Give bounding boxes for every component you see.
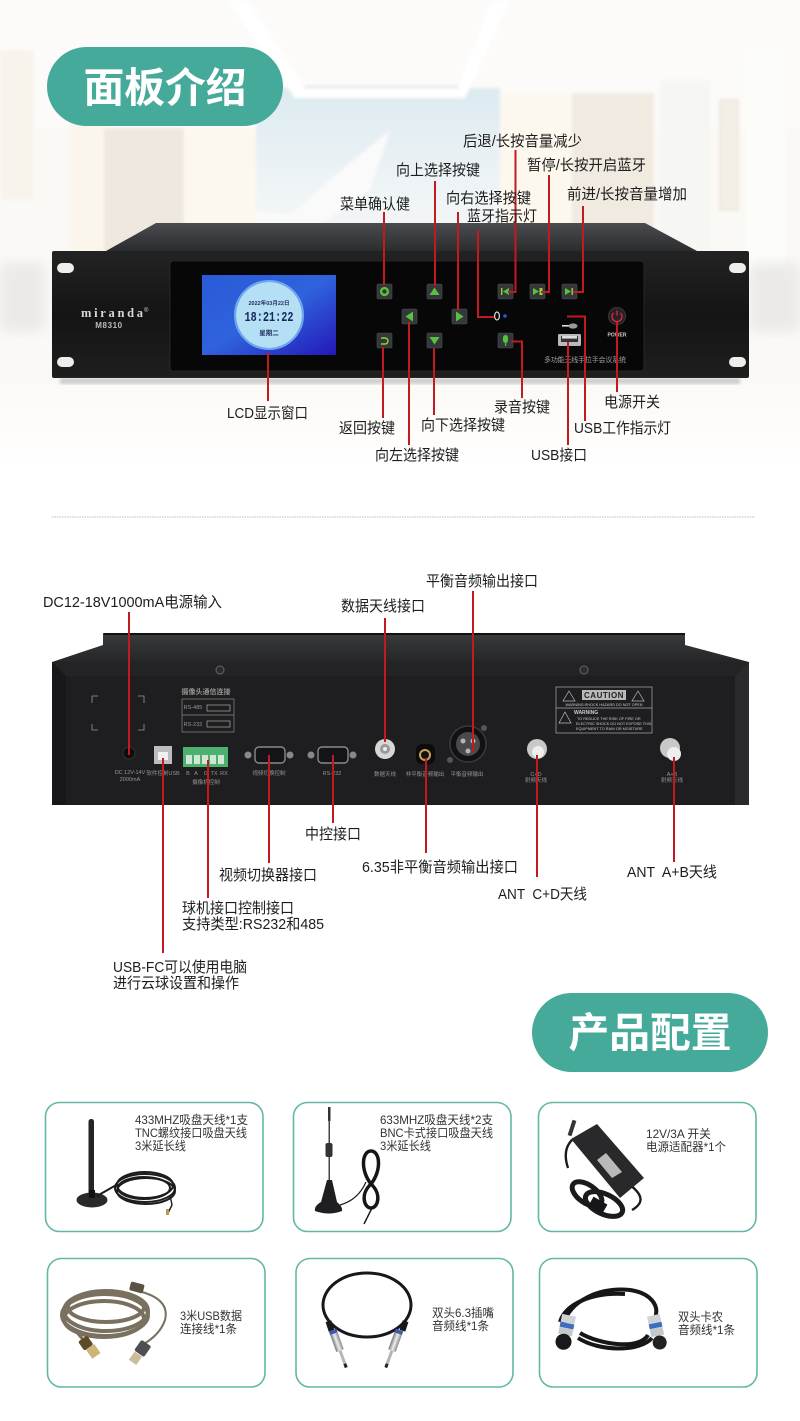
text: XLR cable spec: 音频线*1条 xyxy=(678,1322,735,1337)
callout lines: rear panel xyxy=(129,591,674,953)
LCD screen: 星期二 xyxy=(259,328,279,337)
camera wiring diagram: 摄像头通信连接 xyxy=(182,687,230,696)
green terminal block: B xyxy=(186,771,190,777)
card: XLR audio cable xyxy=(540,1258,757,1387)
USB symbol xyxy=(562,323,578,329)
control window xyxy=(170,261,644,371)
label: USB-FC xyxy=(113,959,247,992)
device face plate xyxy=(52,251,749,378)
label: dome camera control: 支持类型:RS232和485 xyxy=(182,916,324,933)
button: up xyxy=(427,284,442,299)
label: ANT A+B: ANT A+B天线 xyxy=(627,864,717,881)
balanced XLR xyxy=(447,725,487,778)
antenna A+B socket: 射频天线 xyxy=(661,776,683,784)
DC socket xyxy=(115,747,146,783)
green terminal block: RX xyxy=(220,771,228,777)
label: 向左: 向左选择按键 xyxy=(375,447,459,464)
green terminal block: TX xyxy=(210,771,218,777)
label: dome camera control xyxy=(182,900,324,933)
icon: 6.3 jack cable xyxy=(323,1273,411,1369)
icon: magnetic antenna with cable xyxy=(76,1119,175,1215)
card: power adapter xyxy=(538,1102,756,1232)
label: USB指示灯: USB工作指示灯 xyxy=(574,420,671,437)
data antenna BNC: 数据天线 xyxy=(374,770,396,778)
label: 蓝牙: 蓝牙指示灯 xyxy=(467,208,537,225)
brand logo xyxy=(81,306,149,330)
text: USB spec: 连接线*1条 xyxy=(180,1321,237,1336)
LCD screen: 18:21:22 xyxy=(244,311,294,326)
label: 菜单: 菜单确认健 xyxy=(340,196,410,213)
LCD screen: 2022年03月22日 xyxy=(249,299,289,307)
text: 433MHZ spec xyxy=(135,1112,248,1153)
antenna C+D socket: 射频天线 xyxy=(525,776,547,784)
label: 6.35 output: 6.35非平衡音频输出接口 xyxy=(362,859,518,876)
rear body xyxy=(52,662,749,805)
rear screws xyxy=(216,666,588,674)
unbalanced 6.35 jack xyxy=(406,744,444,778)
text: 433MHZ spec: 3米延长线 xyxy=(135,1139,186,1153)
heading pill: 面板介绍: 面板介绍 xyxy=(84,65,246,111)
text: 433MHZ spec: 433MHZ吸盘天线*1支 xyxy=(135,1112,248,1127)
label: 电源: 电源开关 xyxy=(604,394,660,411)
icon: USB cable coil xyxy=(62,1281,166,1365)
icon: sucker antenna with cable xyxy=(315,1107,379,1224)
caution label: EQUIPMENT TO RAIN OR MOISTURE xyxy=(576,727,643,731)
brand logo: M8310 xyxy=(95,321,123,330)
label: balanced output: 平衡音频输出接口 xyxy=(426,573,538,590)
label: 前进: 前进/长按音量增加 xyxy=(567,186,687,203)
button: pause xyxy=(530,284,545,299)
caution label: WARNING xyxy=(574,710,598,716)
text: USB spec: 3米USB数据 xyxy=(180,1308,242,1323)
text: USB spec xyxy=(180,1308,242,1336)
caution label: CAUTION xyxy=(584,691,624,700)
green terminal block xyxy=(183,747,228,786)
text: adapter spec: 电源适配器*1个 xyxy=(646,1140,726,1154)
text: 633MHZ spec xyxy=(380,1112,493,1153)
caution label: WARNING:SHOCK HAZARD DO NOT OPEN xyxy=(566,703,643,707)
green terminal block: A xyxy=(194,771,198,777)
button: left xyxy=(402,309,417,324)
label: USB-FC: 进行云球设置和操作 xyxy=(113,975,239,992)
card: USB cable xyxy=(48,1258,265,1387)
label: LCD: LCD显示窗口 xyxy=(227,404,308,422)
rear panel device xyxy=(52,633,749,805)
antenna C+D socket xyxy=(525,739,547,784)
bracket marks xyxy=(92,696,144,730)
label: 返回: 返回按键 xyxy=(339,420,395,437)
label: data antenna: 数据天线接口 xyxy=(341,598,425,615)
label: 向下: 向下选择按键 xyxy=(421,417,505,434)
video switcher DB9: 视频切换控制 xyxy=(252,769,286,777)
label: 暂停: 暂停/长按开启蓝牙 xyxy=(527,157,646,174)
heading pill: 产品配置 xyxy=(532,993,768,1072)
product caption: 多功能无线手拉手会议系统 xyxy=(544,355,626,364)
camera wiring diagram xyxy=(182,687,234,732)
button: right xyxy=(452,309,467,324)
label: 向右: 向右选择按键 xyxy=(446,190,531,207)
label: USB-FC: USB-FC可以使用电脑 xyxy=(113,959,247,976)
power button xyxy=(608,307,627,338)
RS-232 DB9 xyxy=(308,747,356,777)
DC socket: 2000mA xyxy=(120,777,141,783)
antenna C+D socket: C+D xyxy=(530,772,542,778)
label: 向上: 向上选择按键 xyxy=(396,162,480,179)
balanced XLR: 平衡音频输出 xyxy=(450,770,484,778)
video switcher DB9 xyxy=(244,747,294,777)
antenna A+B socket xyxy=(660,738,683,784)
green terminal block: 摄像机控制 xyxy=(192,778,220,786)
camera wiring diagram: RS-485 xyxy=(184,705,202,711)
caution label: TO REDUCE THE RISK OF FIRE OR xyxy=(577,717,641,721)
device top cover xyxy=(106,223,697,251)
button: back xyxy=(377,333,392,348)
front panel device xyxy=(52,223,749,384)
callout lines: front panel xyxy=(268,150,617,445)
label: central control: 中控接口 xyxy=(305,826,361,843)
USB-B port xyxy=(146,746,180,777)
heading pill: 面板介绍 xyxy=(47,47,283,126)
button: menu confirm xyxy=(377,284,392,299)
text: 433MHZ spec: TNC螺纹接口吸盘天线 xyxy=(135,1125,247,1140)
USB port xyxy=(558,334,581,346)
text: XLR cable spec xyxy=(678,1310,735,1337)
green terminal block: G xyxy=(204,771,208,777)
DC socket: DC 12V-14V xyxy=(115,770,146,776)
power button: POWER xyxy=(608,332,627,338)
label: 录音: 录音按键 xyxy=(494,399,550,416)
icon: XLR cable xyxy=(554,1290,668,1351)
text: 6.3 cable spec: 音频线*1条 xyxy=(432,1318,489,1333)
brand logo: ® xyxy=(144,307,149,314)
text: 6.3 cable spec: 双头6.3插嘴 xyxy=(432,1306,494,1320)
text: adapter spec: 12V/3A 开关 xyxy=(646,1127,711,1141)
caution label xyxy=(556,687,652,733)
heading pill: 产品配置: 产品配置 xyxy=(568,1010,732,1056)
card: 433MHZ antenna xyxy=(46,1102,263,1232)
label: DC input: DC12-18V1000mA电源输入 xyxy=(43,594,222,611)
rack mounting holes xyxy=(57,263,746,367)
brand logo: miranda xyxy=(81,306,144,320)
text: 633MHZ spec: 633MHZ吸盘天线*2支 xyxy=(380,1112,493,1127)
antenna A+B socket: A+B xyxy=(667,772,678,778)
unbalanced 6.35 jack: 非平衡音频输出 xyxy=(406,770,444,778)
text: XLR cable spec: 双头卡农 xyxy=(678,1310,723,1324)
label: video switcher: 视频切换器接口 xyxy=(219,867,317,884)
RS-232 DB9: RS-232 xyxy=(323,771,341,777)
card: 6.3 audio cable xyxy=(296,1258,513,1387)
button: record xyxy=(498,333,513,348)
rear top cover xyxy=(52,633,749,662)
icon: power adapter xyxy=(566,1120,644,1222)
text: 633MHZ spec: 3米延长线 xyxy=(380,1139,431,1153)
text: 6.3 cable spec xyxy=(432,1306,494,1333)
button: next xyxy=(562,284,577,299)
data antenna BNC xyxy=(374,739,396,778)
caution label: ELECTRIC SHOCK DO NOT EXPOSE THIS xyxy=(576,722,652,726)
text: adapter spec xyxy=(646,1127,726,1154)
LCD screen xyxy=(202,275,336,355)
label: USB接口: USB接口 xyxy=(531,447,587,464)
label: ANT C+D: ANT C+D天线 xyxy=(498,886,587,903)
button: down xyxy=(427,333,442,348)
card: 633MHZ antenna xyxy=(294,1102,511,1232)
camera wiring diagram: RS-232 xyxy=(184,722,202,728)
text: 633MHZ spec: BNC卡式接口吸盘天线 xyxy=(380,1125,493,1140)
button: previous xyxy=(498,284,513,299)
USB-B port: 软件控制USB xyxy=(146,769,180,777)
label: dome camera control: 球机接口控制接口 xyxy=(182,900,294,917)
bluetooth indicator xyxy=(495,312,507,320)
label: 后退: 后退/长按音量减少 xyxy=(463,133,582,150)
